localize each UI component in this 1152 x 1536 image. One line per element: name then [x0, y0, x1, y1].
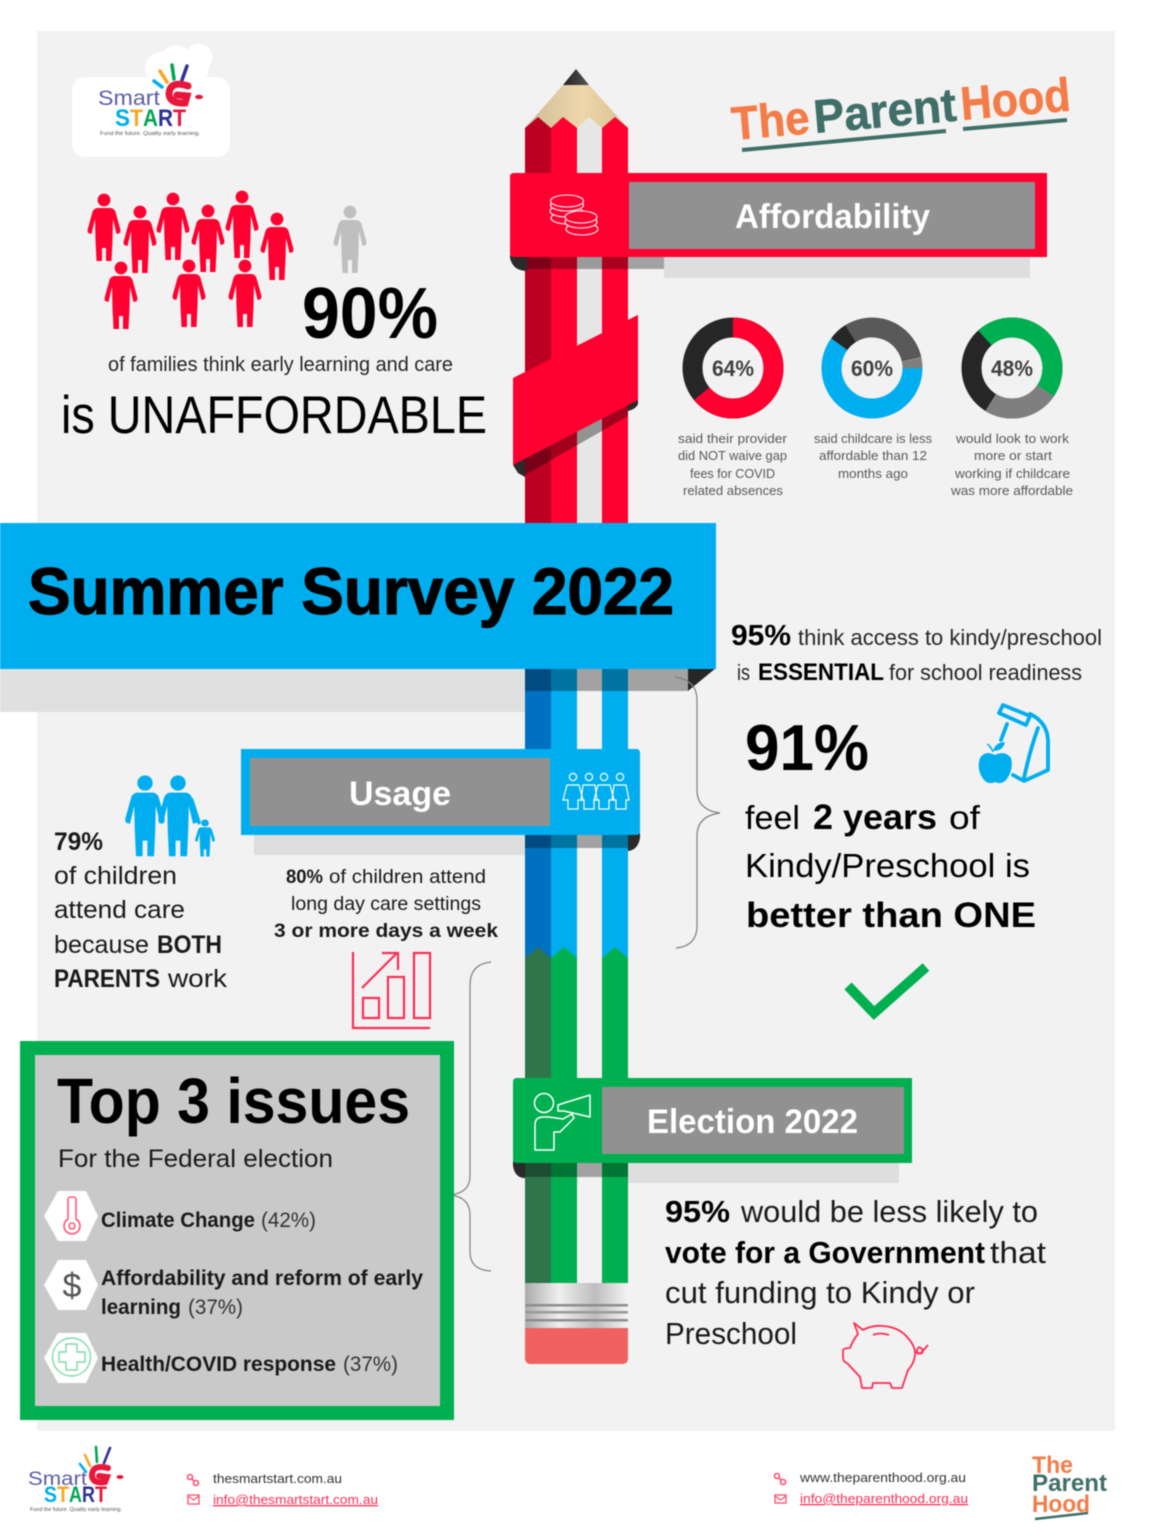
banner shadow: [510, 255, 1030, 278]
79% statistic: BOTH: [157, 931, 222, 959]
banner title: Affordability: [735, 198, 930, 236]
icon: link: [774, 1474, 786, 1484]
icon: mail: [775, 1495, 786, 1503]
issue affordability: learning: [101, 1296, 181, 1319]
95% election text: 95%: [665, 1194, 730, 1229]
Usage banner: [241, 749, 640, 855]
79% statistic: work: [167, 965, 228, 993]
banner title: Election 2022: [647, 1103, 858, 1141]
logo text START: T: [130, 105, 143, 132]
80% statistic: 3 or more days a week: [274, 920, 498, 942]
footer logo tagline: Fund the future. Quality early learning.: [30, 1507, 122, 1513]
logo underline: [742, 120, 1067, 150]
caption 48%: was more affordable: [950, 483, 1073, 498]
banner shadow: [254, 833, 640, 855]
footer logo hand: [80, 1447, 124, 1482]
caption 64%: [678, 431, 788, 498]
banner shadow: [513, 1161, 899, 1183]
footer logo START: T: [57, 1482, 69, 1507]
donut 60%: [815, 311, 929, 425]
footer: Parent Hood logo: The: [1032, 1452, 1073, 1479]
title banner fill: [0, 523, 716, 669]
caption 64%: did NOT waive gap: [678, 448, 787, 463]
95% essential text: is: [737, 660, 750, 685]
issue climate change: Climate Change: [101, 1209, 255, 1232]
icon: rising bar chart: [353, 952, 430, 1028]
banner body: [241, 749, 640, 835]
caption 48%: more or start: [974, 448, 1052, 463]
logo text START: A: [143, 105, 158, 132]
issue health: (37%): [343, 1353, 398, 1376]
caption 60%: affordable than 12: [819, 448, 927, 463]
banner body: [510, 173, 1047, 257]
footer: Parent Hood contact: [774, 1470, 968, 1506]
logo word Hood: Hood: [958, 68, 1072, 130]
logo text START: T: [173, 105, 186, 132]
banner grey plate: [629, 182, 1035, 249]
title banner shadow: [0, 668, 716, 712]
95% election text: [665, 1194, 1046, 1351]
95% election text: cut funding to Kindy or: [665, 1275, 975, 1310]
caption 48%: [950, 431, 1073, 498]
95% election text: Preschool: [665, 1316, 797, 1351]
90% figure: 90%: [302, 274, 438, 354]
issue health: Health/COVID response: [101, 1353, 336, 1376]
91% figure: 91%: [745, 711, 869, 784]
people pictogram: 9 of 10: [88, 191, 366, 329]
caption 64%: fees for COVID: [690, 466, 775, 481]
icon: dollar: [44, 1260, 98, 1310]
caption 60%: said childcare is less: [814, 431, 932, 446]
banner body: [513, 1078, 912, 1163]
icon: group of four children: [563, 773, 629, 809]
95% essential text: for school readiness: [889, 660, 1082, 685]
icon: family: [125, 775, 215, 857]
caption 48%: working if childcare: [954, 466, 1070, 481]
The Parent Hood logo: [729, 68, 1072, 150]
pencil: [525, 69, 628, 1364]
issue affordability: Affordability and reform of early: [101, 1267, 423, 1290]
footer logo START: R: [82, 1482, 95, 1507]
panel fill: [35, 1055, 440, 1406]
panel heading: Top 3 issues: [57, 1065, 410, 1137]
logo word The: The: [729, 90, 812, 150]
91% statistic: [745, 711, 1036, 935]
footer: Smart Start contact: [188, 1471, 378, 1507]
79% statistic: attend care: [54, 896, 185, 924]
logo backdrop: [72, 44, 230, 157]
website: www.theparenthood.org.au: [799, 1470, 966, 1485]
icon: link: [188, 1474, 198, 1486]
website: thesmartstart.com.au: [213, 1471, 342, 1486]
caption 60%: [814, 431, 932, 481]
footer logo START: A: [69, 1482, 82, 1507]
95% essential text: ESSENTIAL: [758, 659, 884, 686]
icon: thermometer: [44, 1191, 98, 1241]
logo word Parent: Parent: [811, 78, 959, 143]
title: Summer Survey 2022: [28, 554, 674, 628]
footer: Parent Hood logo: Parent: [1032, 1470, 1107, 1497]
donut 64%: 64%: [712, 356, 754, 381]
caption 48%: would look to work: [955, 431, 1070, 446]
80% statistic: [274, 866, 498, 942]
caption 64%: related absences: [683, 483, 784, 498]
banner grey plate: [250, 758, 550, 826]
title banner: [0, 523, 716, 712]
pencil ferrule: [525, 1283, 628, 1328]
95% election text: vote for a Government: [665, 1235, 985, 1270]
logo text START: S: [115, 105, 130, 132]
footer logo START: [44, 1482, 107, 1507]
80% statistic: 80%: [286, 866, 323, 888]
red people: [88, 191, 294, 329]
caption 60%: months ago: [838, 466, 908, 481]
donut 60%: 60%: [851, 356, 893, 381]
Smart Start logo: [72, 44, 230, 157]
79% statistic: 79%: [54, 828, 103, 856]
donut captions: [678, 431, 1073, 498]
pencil eraser: [525, 1328, 628, 1364]
donut 48%: [955, 311, 1069, 425]
91% description: Kindy/Preschool is: [745, 847, 1030, 884]
logo hand: [154, 65, 203, 103]
95% essential text: [731, 620, 1102, 686]
ribbon around pencil: [513, 315, 638, 477]
91% description: [745, 798, 1036, 935]
Election banner: [513, 1078, 912, 1183]
95% essential text: think access to kindy/preschool: [798, 625, 1102, 650]
footer logo Smart: Smart: [28, 1469, 88, 1490]
unaffordable text: is UNAFFORDABLE: [61, 386, 487, 445]
footer logo START: T: [95, 1482, 107, 1507]
donut 64%: [692, 328, 774, 408]
pencil green section: [525, 947, 628, 1283]
issue affordability: [101, 1267, 423, 1319]
80% statistic: long day care settings: [291, 893, 481, 915]
icon: check mark: [848, 967, 926, 1013]
91% description: feel: [745, 799, 800, 836]
91% description: 2 years: [813, 798, 937, 837]
icon: piggy bank: [843, 1323, 928, 1388]
panel border: [20, 1041, 454, 1420]
icon: person with megaphone: [534, 1094, 590, 1150]
Affordability banner: [510, 173, 1047, 278]
brace left: [450, 962, 491, 1271]
logo text START: R: [158, 105, 173, 132]
90% caption: of families think early learning and care: [108, 354, 453, 376]
footer logo START: S: [44, 1482, 57, 1507]
footer: Parent Hood logo: Hood: [1032, 1491, 1090, 1518]
95% election text: would be less likely to: [740, 1194, 1038, 1229]
icon: coins: [550, 195, 598, 235]
icon: lunch bag and apple: [979, 705, 1048, 783]
95% essential text: 95%: [731, 620, 791, 652]
banner grey plate: [602, 1087, 904, 1154]
icon: mail: [188, 1495, 199, 1504]
pencil blue section: [525, 668, 628, 960]
grey person: [334, 206, 366, 273]
email: info@theparenthood.org.au: [800, 1491, 968, 1506]
email: info@thesmartstart.com.au: [213, 1492, 378, 1507]
footer: Smart Start logo: [28, 1447, 124, 1513]
donut charts: [692, 311, 1069, 425]
79% statistic: [54, 828, 228, 993]
79% statistic: PARENTS: [54, 965, 160, 993]
icon: dollar: $: [63, 1267, 82, 1305]
logo text Smart: Smart: [98, 87, 160, 110]
logo tagline: Fund the future. Quality early learning.: [100, 131, 200, 137]
pencil red section: [525, 117, 628, 523]
79% statistic: because: [54, 931, 149, 959]
80% statistic: of children attend: [329, 866, 486, 888]
panel: top 3 issues: [20, 1041, 454, 1420]
91% description: better than ONE: [746, 896, 1036, 935]
95% election text: that: [990, 1235, 1046, 1270]
issue affordability: (37%): [188, 1296, 243, 1319]
90% statistic: [61, 274, 487, 445]
issue climate change: (42%): [261, 1209, 316, 1232]
caption 64%: said their provider: [678, 431, 788, 446]
pencil lead: [563, 69, 589, 85]
pencil wood tip: [525, 85, 628, 128]
79% statistic: of children: [54, 862, 177, 890]
banner title: Usage: [349, 775, 451, 813]
donut 48%: 48%: [991, 356, 1033, 381]
brace right: [675, 677, 720, 948]
footer: Parent Hood logo: [1032, 1452, 1107, 1519]
icon: health cross: [44, 1333, 98, 1383]
logo text START: [115, 105, 186, 132]
91% description: of: [949, 799, 981, 836]
panel subheading: For the Federal election: [58, 1145, 333, 1173]
